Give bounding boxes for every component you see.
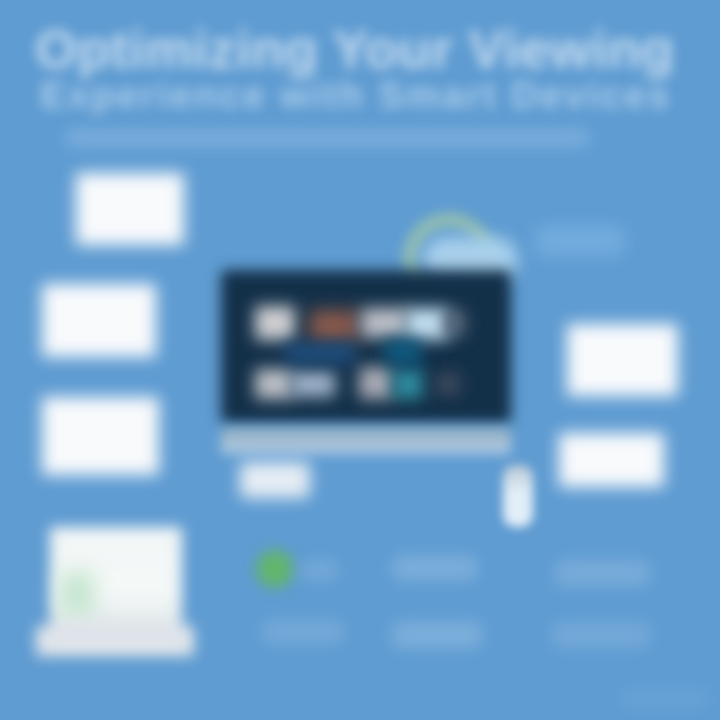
wifi arc <box>403 213 495 305</box>
footer credit <box>620 688 710 708</box>
panel: callout top left <box>76 173 184 245</box>
thumbnails row 2 <box>242 327 466 411</box>
tv stand bar <box>221 428 511 454</box>
description line <box>65 130 590 146</box>
laptop screen <box>50 527 182 645</box>
blue band 2 <box>385 339 421 365</box>
thumb 6 <box>255 369 293 399</box>
thumb 9 <box>393 369 423 399</box>
laptop base <box>36 626 194 656</box>
thumb 8 <box>359 367 393 399</box>
thumb 1 <box>255 306 295 340</box>
thumb 3 <box>361 308 407 338</box>
subtitle heading: Experience with Smart Devices <box>40 75 671 117</box>
thumb 7 <box>291 371 335 397</box>
label row 1 col 3 <box>555 560 650 586</box>
thumb 4 <box>405 308 449 340</box>
label row 2 col 2 <box>392 622 482 648</box>
label row 2 col 3 <box>552 622 650 648</box>
panel: callout right lower <box>559 433 664 487</box>
tv screen <box>221 270 511 423</box>
icon: wifi cloud <box>398 208 526 282</box>
thumbnails row 1 <box>242 293 474 353</box>
title: Optimizing Your Viewing <box>35 20 674 80</box>
label row 1 col 2 <box>392 556 477 580</box>
device: smart tv <box>210 259 522 461</box>
icon: green status dot <box>256 550 294 588</box>
blue band <box>285 343 355 363</box>
thumb 10 <box>435 373 461 395</box>
thumb 2 <box>309 310 359 342</box>
wifi label <box>535 225 625 257</box>
green accent <box>60 572 94 616</box>
device: laptop <box>26 516 204 666</box>
thumb 5 <box>445 310 465 336</box>
icon: streaming box <box>240 462 310 498</box>
label row 1 col 1 <box>300 560 338 580</box>
cloud <box>423 237 518 283</box>
label row 2 col 1 <box>262 620 344 644</box>
panel: callout right upper <box>567 324 678 396</box>
panel: callout middle left <box>42 284 156 357</box>
icon: remote control <box>503 465 533 527</box>
panel: callout lower left <box>42 397 159 475</box>
